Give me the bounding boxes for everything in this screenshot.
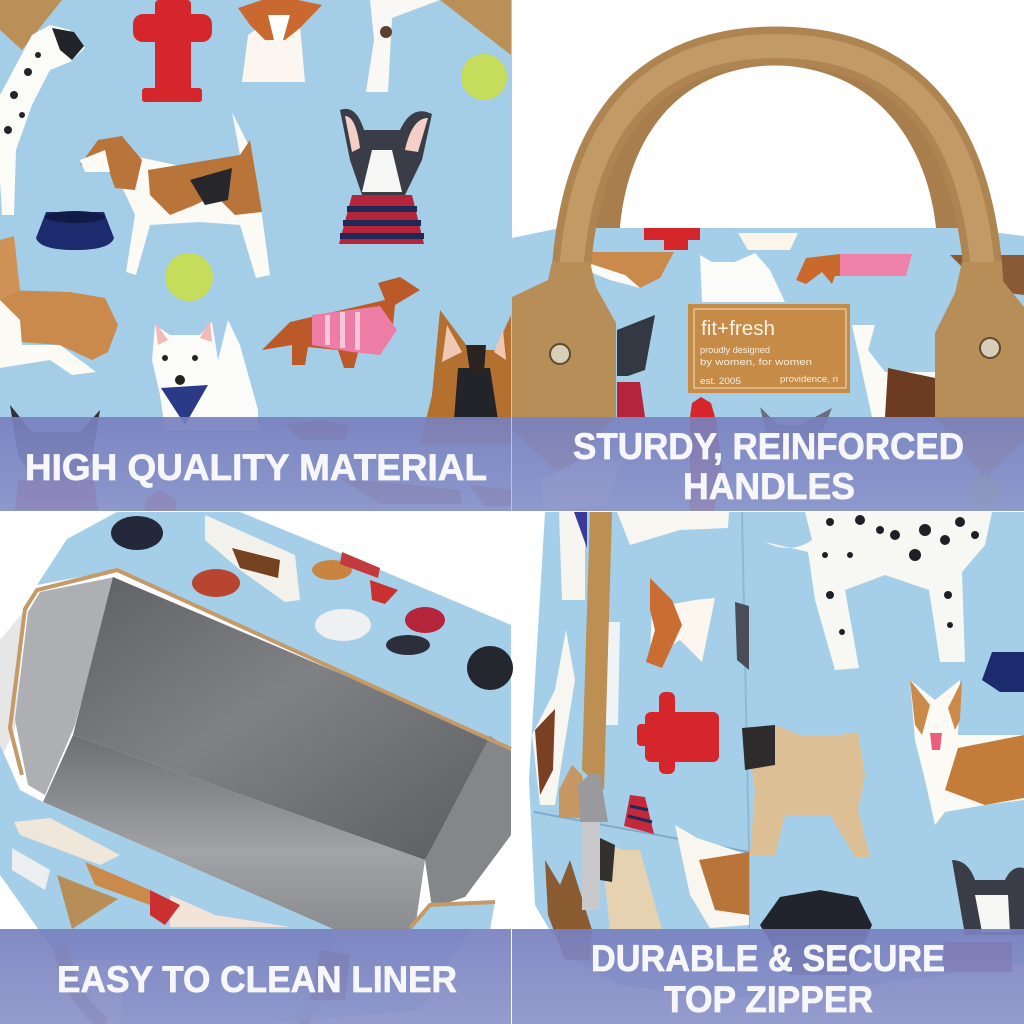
icon: tan dog behind pull xyxy=(559,765,590,818)
icon: handle corners xyxy=(0,0,511,55)
icon: lower left dogs xyxy=(545,825,749,960)
bag front xyxy=(529,512,1024,1000)
icon: red hydrant xyxy=(133,0,212,102)
liner right wall xyxy=(425,736,511,908)
panel: sturdy reinforced handles xyxy=(512,46,1024,511)
icon: french bulldog xyxy=(942,860,1024,972)
panel: high quality material xyxy=(0,0,512,511)
band: high quality material xyxy=(0,417,511,511)
icon: corgi xyxy=(0,236,118,375)
icon: navy bowl xyxy=(982,652,1024,692)
icon: lower dog in sweater xyxy=(10,405,100,510)
icon: french bulldog in sweater xyxy=(339,109,432,244)
bag top flap xyxy=(37,512,511,749)
icon: striped sweater xyxy=(624,795,654,834)
icon: red hydrant sideways xyxy=(637,692,719,774)
heading: HIGH QUALITY MATERIAL xyxy=(25,447,487,488)
icon: lower motifs xyxy=(12,818,290,929)
band: durable and secure top zipper xyxy=(512,929,1024,1024)
lower right bag corner xyxy=(410,902,495,929)
liner floor xyxy=(43,735,425,929)
zipper pull xyxy=(578,774,608,910)
icon: bag top motifs xyxy=(584,228,1024,417)
liner left wall xyxy=(15,577,115,795)
icon: top flap motifs xyxy=(111,515,513,690)
icon: lab dog xyxy=(760,890,872,975)
bag body xyxy=(512,228,1024,511)
heading: EASY TO CLEAN LINER xyxy=(57,959,457,1000)
icon: back handle xyxy=(606,52,950,240)
icon: papillon xyxy=(646,578,715,668)
icon: tennis ball top xyxy=(461,54,507,100)
icon: dalmatian xyxy=(0,25,85,215)
lower zipper trim xyxy=(410,902,495,928)
icon: lower scattered motifs xyxy=(145,420,511,511)
icon: tennis ball xyxy=(165,253,213,301)
bottom seam xyxy=(534,812,749,852)
icon: dachshund in pink sweater xyxy=(262,277,420,368)
icon: german shepherd xyxy=(420,310,511,445)
icon: lower motifs under band xyxy=(540,407,1001,511)
icon: white dog beside zipper xyxy=(532,512,749,805)
heading line two: HANDLES xyxy=(683,466,855,507)
icon: rivets xyxy=(550,338,1000,364)
insulated liner interior xyxy=(15,577,511,929)
icon: left handle base xyxy=(512,262,616,476)
band: easy to clean liner xyxy=(0,929,511,1024)
icon: beagle xyxy=(80,112,270,278)
zipper trim xyxy=(10,570,511,775)
heading line two: TOP ZIPPER xyxy=(664,979,873,1020)
icon: white dog legs xyxy=(366,0,440,92)
icon: navy bowl xyxy=(36,211,114,250)
brand tagline: proudly designed xyxy=(700,345,770,356)
bag fold xyxy=(742,512,749,930)
strap and lower bag shown through band xyxy=(60,929,470,1024)
location: providence, ri xyxy=(780,374,838,384)
icon: pug xyxy=(742,725,870,857)
bag lower flap xyxy=(0,745,333,960)
icon: westie xyxy=(152,320,258,430)
brand name: fit+fresh xyxy=(701,318,775,340)
zipper tape xyxy=(582,512,612,790)
heading line one: STURDY, REINFORCED xyxy=(573,426,964,467)
soft shadow xyxy=(0,610,25,760)
icon: right handle base xyxy=(935,262,1024,478)
icon: papillon dog xyxy=(238,0,322,82)
established year: est. 2005 xyxy=(700,376,741,386)
band: sturdy reinforced handles xyxy=(512,417,1024,511)
panel: durable and secure top zipper xyxy=(529,512,1024,1000)
heading line one: DURABLE & SECURE xyxy=(591,938,945,979)
icon: dalmatian xyxy=(765,512,992,670)
brand tagline line two: by women, for women xyxy=(700,357,812,368)
panel: easy to clean liner xyxy=(0,512,513,1024)
brand patch xyxy=(688,304,850,393)
liner back wall xyxy=(73,577,492,860)
icon: corgi xyxy=(910,680,1024,825)
icon: carry handle arch xyxy=(570,46,985,300)
